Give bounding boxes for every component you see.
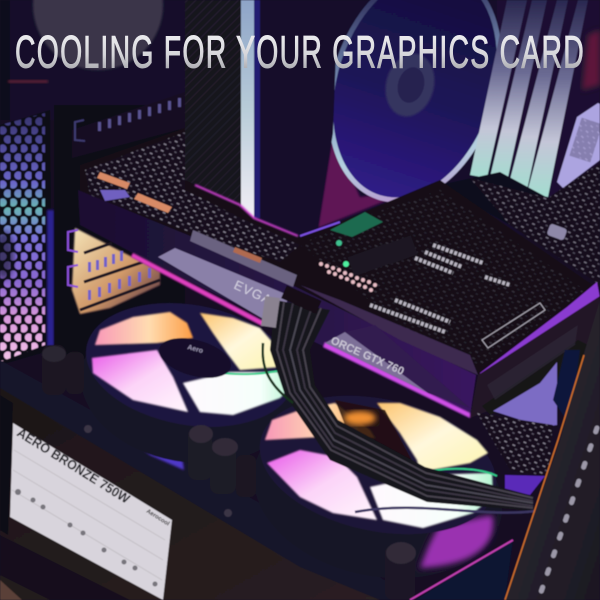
PSU specification label: AERO BRONZE 750W [14,425,133,507]
M.2 heatsink plate [557,103,600,188]
fan: left: Aero [186,344,204,355]
power supply body [0,388,380,600]
right case panel with dotted vents [505,300,600,600]
graphics card front face [78,190,600,418]
GeForce GTX 760 label: ORCE GTX 760 [329,335,406,378]
RAM sticks [470,0,600,197]
fan: right [237,375,519,600]
thermal pads on PCB [97,172,172,213]
PSU specification label [10,423,172,600]
top face of power supply rail [0,360,415,600]
power cable bundle [263,300,535,513]
upper-left dark case interior with grey fan disc [0,0,185,120]
gold lit expansion slot covers [68,228,160,314]
motherboard [440,163,600,285]
graphics card PCB [80,128,600,375]
fan mounting screws and posts [42,345,416,600]
left case mesh panel [0,110,54,365]
PCIe power connector [261,285,322,328]
EVGA logo: EVGA [232,277,274,308]
right CPU cooler fan area [254,0,600,235]
mounting bolts on rail [84,425,232,517]
PSU specification label: Aerocool [145,509,170,528]
bottom frame with purple edge light [410,540,513,600]
fan: left [69,288,307,480]
purple light strip along fan mount [135,443,184,470]
orange glow fan hub right [335,400,417,470]
expansion slot bracket dark [54,92,185,365]
tower cooler block with light stripe [185,0,338,236]
graphics card support shroud right [477,325,598,495]
fan hub [155,331,235,385]
